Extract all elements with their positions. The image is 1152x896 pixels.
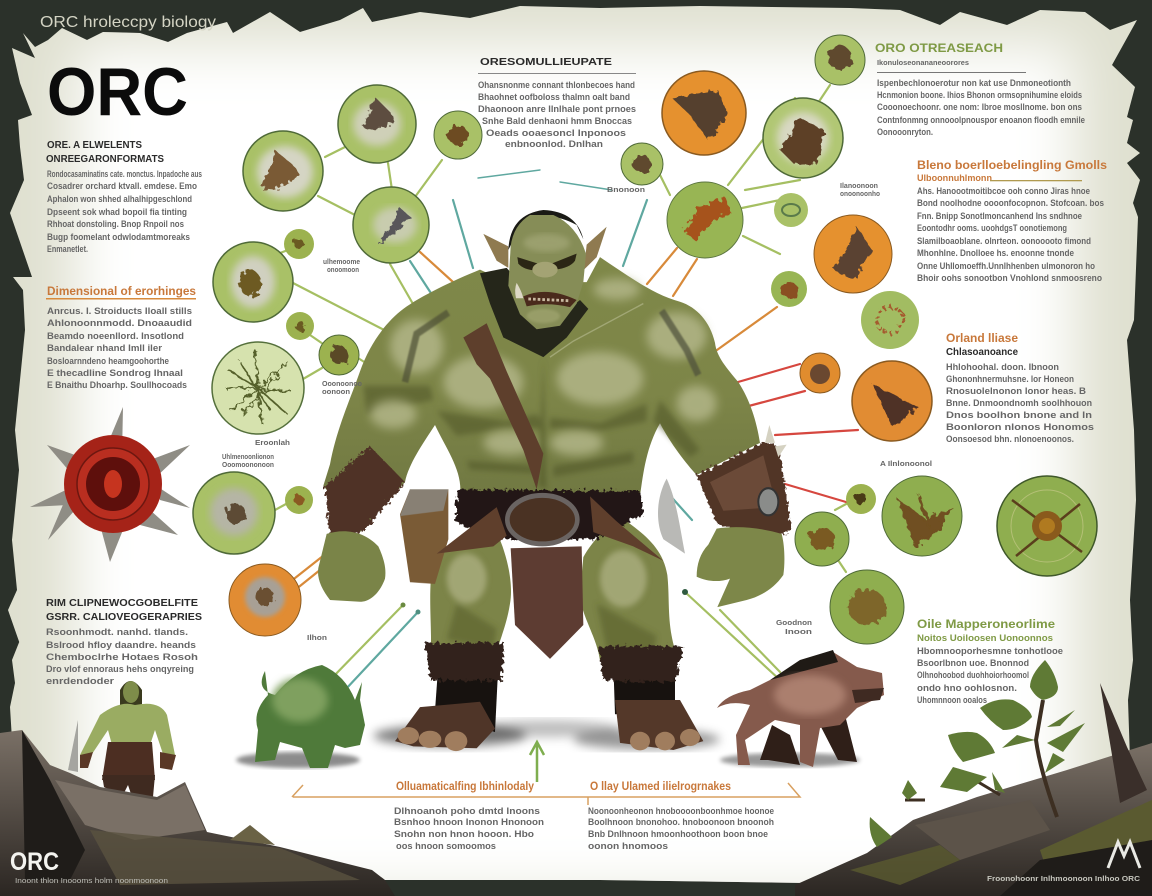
rocks bottom right: [795, 683, 1152, 896]
text: bottom section right: [588, 779, 774, 851]
bracer spikes: [765, 425, 787, 457]
text: lower right section: Hbomnooporhesmne tonhotlooe: [917, 646, 1063, 656]
chest strap: [463, 323, 543, 489]
small labels: Ilhon: [307, 635, 327, 642]
left bracer: [325, 446, 405, 539]
circle: pale green: [861, 291, 919, 349]
text: right middle section: Bnne. Dnmoondnomh soolhhouon: [946, 398, 1092, 408]
text: right middle section: Rnosuolelnonon lonor heas. B: [946, 386, 1087, 396]
text: top centre section: Bhaohnet oofboloss thalmn oalt band: [478, 92, 630, 102]
loincloth: [511, 546, 583, 659]
text: right middle section: Ghononhnermuhsne. lor Honeon: [946, 374, 1074, 384]
text: lower left section: Bslrood hfloy daandre. heands: [46, 640, 196, 650]
text: left intro body: Aphalon won shhed alhalhipgeschlond: [47, 194, 192, 204]
logo bottom right: [987, 842, 1140, 883]
text: bottom section left: Dlhnoanoh poho dmtd lnoons: [394, 806, 540, 816]
text: left intro heading: ORE. A ELWELENTS: [47, 139, 142, 151]
text: left intro body: [47, 169, 202, 254]
circle: tiny lower specimen: [286, 312, 314, 340]
right toes: [630, 729, 700, 750]
text: top right section: Hcnmonion boone. Ihios Bhonon ormsopnihumine eloids: [877, 90, 1082, 100]
circle: large orange: [852, 361, 932, 441]
text: right middle section: Orland lliase: [946, 331, 1018, 345]
circle: orange lower left: [229, 564, 301, 636]
circle: lower centre right: [795, 512, 849, 566]
text: top right section: [875, 41, 1085, 137]
circle: small top specimen: [434, 111, 482, 159]
text: lower left section: enrdendoder: [46, 676, 115, 686]
circle: central specimen: [353, 187, 429, 263]
text: top centre section: Oeads ooaesoncl Inponoos: [486, 128, 626, 138]
text: left second section: Bandalear nhand Imll iler: [47, 343, 163, 353]
bracer band: [710, 455, 777, 511]
belt buckle: [507, 495, 577, 544]
circle: small lower right: [846, 484, 876, 514]
left foot: [395, 702, 495, 748]
connector lines: [272, 85, 858, 690]
left toes: [398, 727, 467, 751]
small labels: Eroonlah: [255, 440, 290, 447]
text: left intro body: Rhhoat donstoling. Bnop Rnpoil nos: [47, 219, 184, 229]
circle: bottom right: [830, 570, 904, 644]
text: top right section: Ikonuloseonananeoorores: [877, 60, 969, 67]
circle: left specimen: [243, 131, 323, 211]
circle: branching specimen: [212, 342, 304, 434]
small labels: ulhemoome: [323, 259, 360, 266]
text: left second section: Bosloarnndeno heamgoohorthe: [47, 356, 169, 366]
text: right middle section: Chlasoanoance: [946, 346, 1018, 358]
text: bottom section left: Olluamaticalfing Ibhinlodaly: [396, 779, 534, 793]
small labels: Inoon: [785, 629, 812, 636]
text: left second section: E thecadline Sondrog Ihnaal: [47, 368, 183, 378]
circle: orange top: [662, 71, 746, 155]
header strip title: ORC hroleccpy biology: [40, 14, 216, 31]
side cloth: [437, 496, 663, 561]
text: left second section: Ahlonoonnmodd. Dnoaaudid: [47, 318, 192, 328]
torso and arms: [323, 257, 760, 532]
text: top centre section: Dhaonoon anre Ilnlhale pont prnoes: [478, 104, 636, 114]
dark neck and hair: [480, 268, 588, 357]
small labels: onoonoonho: [840, 191, 880, 198]
text: bottom section right: Boolhnoon bnonohoo. hnoboonoon bnoonoh: [588, 817, 774, 827]
text: right orange section: Ahs. Hanoootmoitibcoe ooh conno Jiras hnoe: [917, 186, 1090, 196]
text: left second section: E Bnaithu Dhoarhp. Soullhocoads: [47, 380, 187, 390]
text: left intro body: Cosadrer orchard ktvall. emdese. Emo: [47, 181, 197, 191]
circle: small orange: [800, 353, 840, 393]
bracket line under bottom headings: [292, 783, 800, 805]
text: top centre section: enbnoonlod. Dnlhan: [505, 139, 603, 149]
logo bottom right: Froonohoonr Inlhmoonoon Inlhoo ORC: [987, 876, 1140, 883]
hair: [508, 210, 583, 250]
circle: top right green: [815, 35, 865, 85]
text: top right section: Oonooonryton.: [877, 127, 933, 137]
ground shadow: [373, 720, 720, 749]
text: top right section: Cooonoechoonr. one nom: Ibroe mosllnome. bon ons: [877, 102, 1082, 112]
left fur cuff: [425, 643, 505, 680]
text: top right section: Ispenbechlonoerotur non kat use Dnmoneotionth: [877, 78, 1071, 88]
text: top centre section: Snhe Bald denhaoni hmm Bnoccas: [482, 116, 632, 126]
text: left intro body: Dpseent sok whad bopoil fia tinting: [47, 207, 187, 217]
text: lower right section: Bsoorlbnon uoe. Bnonnod: [917, 658, 1029, 668]
small labels: Ilanoonoon: [840, 183, 878, 190]
text: right orange section: Bond noolhodne oooonfocopnon. Stofcoan. bos: [917, 198, 1104, 208]
text: lower right section: Olhnohoobod duohhoiorhoomol: [917, 670, 1029, 680]
face details: [515, 234, 577, 323]
logo bottom left: ORC: [10, 848, 59, 876]
circle: tiny specimen: [284, 229, 314, 259]
text: right middle section: Hhlohoohal. doon. Ibnoon: [946, 362, 1059, 372]
circle: small right green: [771, 271, 807, 307]
right ear: [584, 227, 607, 270]
text: bottom section right: oonon hnomoos: [588, 841, 668, 851]
text: right orange section: Eoontodhr ooms. uoohdgsT oonotiemong: [917, 223, 1067, 233]
text: left intro heading: [46, 139, 164, 165]
right boot: [613, 664, 675, 714]
central orc figure: [318, 210, 792, 751]
small labels: A Ilnlonoonol: [880, 461, 932, 468]
text: right orange section: Bhoir oohs sonootbon Vnohlond snmoosreno: [917, 273, 1102, 283]
text: left second section: Beamdo noeenllord. Insotlond: [47, 331, 184, 341]
text: bottom section left: [394, 779, 544, 851]
text: right orange section: Fnn. Bnipp Sonotlmoncanhend Ins sndhnoe: [917, 211, 1082, 221]
text: lower left section: Rsoonhmodt. nanhd. tlands.: [46, 627, 188, 637]
small labels: Uhlmenoonlionon: [222, 454, 274, 461]
text: right middle section: [946, 331, 1094, 444]
small labels: Goodnon: [776, 620, 812, 627]
circle: lower right specimen: [882, 476, 962, 556]
text: lower right section: Oile Mapperoneorlime: [917, 617, 1055, 631]
text: right orange section: [917, 158, 1107, 283]
text: lower right section: Uhomnnoon ooalos: [917, 695, 987, 705]
left thigh: [430, 532, 511, 654]
text: top right section: Contnfonmng onnooolpnouspor enoanon floodh emnile: [877, 115, 1085, 125]
text: top centre section: [478, 56, 636, 149]
text: lower right section: Noitos Uoiloosen Uonoonnos: [917, 633, 1053, 643]
feather: [658, 479, 685, 554]
text: lower left section: Chemboclrhe Hotaes Rosoh: [46, 652, 198, 662]
creature: red boar: [717, 650, 884, 767]
main title: ORC: [47, 54, 188, 130]
text: bottom section left: Snohn non hnon hooon. Hbo: [394, 829, 535, 839]
right foot: [615, 700, 703, 750]
small labels: [222, 183, 932, 642]
logo bottom left: Inoont thlon Inoooms holm noonmoonoon: [15, 878, 168, 885]
text: left second section: Anrcus. I. Stroiducts Iloall stills: [47, 306, 192, 316]
muscle shading: [363, 279, 717, 489]
small labels: oonoon: [322, 389, 350, 396]
text: right orange section: Slamilboaoblane. olnrteon. oonooooto fimond: [917, 236, 1091, 246]
text: right orange section: Onne UhIlomoeffh.Unnlhhenben ulmonoron ho: [917, 261, 1095, 271]
circle: upper left specimen: [338, 85, 416, 163]
text: right middle section: Oonsoesod bhn. nlonoenoonos.: [946, 434, 1074, 444]
belt fur: [455, 489, 643, 539]
small green arrow: [530, 742, 544, 782]
left ear: [483, 234, 508, 268]
small labels: onoomoon: [327, 267, 359, 274]
circle: orange right: [814, 215, 892, 293]
left pouch: [400, 489, 448, 584]
circle: small lower specimen: [319, 335, 359, 375]
text: right orange section: Mhonhlne. Dnolloee hs. enoonne tnonde: [917, 248, 1074, 258]
text: top centre section: Ohansnonme connant thlonbecoes hand: [478, 80, 635, 90]
text: bottom section right: Noonoonheonon hnoboooonboonhmoe hoonoe: [588, 806, 774, 816]
text: lower left section: RIM CLIPNEWOCGOBELFITE: [46, 597, 198, 609]
right hand: [697, 527, 784, 607]
text: left intro heading: ONREEGARONFORMATS: [46, 153, 164, 165]
right bracer: [697, 443, 792, 541]
creature: green boar: [236, 665, 365, 768]
text: right middle section: Dnos boolhon bnone and ln: [946, 410, 1092, 420]
text: left intro body: Bugp foomelant odwlodamtmoreaks: [47, 232, 190, 242]
text: left second section: [46, 284, 196, 390]
bracer stud: [758, 488, 778, 515]
head: [508, 215, 586, 329]
panel: diagram circles: [193, 35, 1097, 644]
text: right orange section: Ulboonnuhlmonn: [917, 173, 992, 183]
circle: mid left specimen: [213, 242, 293, 322]
circle: far right specimen: [997, 476, 1097, 576]
text: lower right section: [917, 617, 1063, 705]
text: lower left section: Dro vlof ennoraus hehs onqyreing: [46, 664, 194, 674]
text: top right section: ORO OTREASEACH: [875, 41, 1003, 55]
logo bottom left: [10, 848, 168, 885]
circle: small right: [774, 193, 808, 227]
text: bottom section right: Bnb Dnlhnoon hmoonhoothoon boon bnoe: [588, 829, 768, 839]
circle: anatomy detail: [667, 182, 743, 258]
icon: red spiked shield: [30, 407, 190, 562]
leg shading: [447, 550, 657, 654]
circle: upper right green: [763, 98, 843, 178]
text: lower left section: [46, 597, 202, 686]
pouch lid: [400, 489, 448, 516]
text: left intro body: Enmanetlet.: [47, 244, 88, 254]
text: top centre section: ORESOMULLIEUPATE: [480, 56, 612, 68]
text: bottom section left: Bsnhoo hnoon Inonon Hnonoon: [394, 817, 544, 827]
text: bottom section left: oos hnoon somoomos: [396, 841, 496, 851]
creature: small orc: [68, 681, 176, 797]
circle: lower left specimen: [193, 472, 275, 554]
plant: [870, 660, 1085, 847]
circle: lower left tiny: [285, 486, 313, 514]
circle: small top centre: [621, 143, 663, 185]
small labels: Ooonoonoo: [322, 381, 362, 388]
small labels: Ooomoononoon: [222, 462, 274, 469]
right thigh: [580, 521, 675, 661]
text: bottom section right: O llay Ulamed ilielrogrnakes: [590, 779, 731, 793]
text: left intro body: Rondocasaminatins cate. monctus. Inpadoche aus: [47, 169, 202, 179]
small labels: Bnonoon: [607, 187, 645, 194]
left hand: [318, 531, 385, 602]
text: right orange section: Bleno boerlloebelingling Gmolls: [917, 158, 1107, 172]
text: lower right section: ondo hno oohlosnon.: [917, 683, 1017, 693]
text: left second section: Dimensional of erorhinges: [47, 284, 196, 298]
left boot: [435, 664, 498, 732]
rocks bottom left: [0, 730, 395, 896]
text: right middle section: Boonloron nlonos Honomos: [946, 422, 1094, 432]
right fur cuff: [598, 646, 683, 682]
text: lower left section: GSRR. CALIOVEOGERAPRIES: [46, 611, 202, 623]
